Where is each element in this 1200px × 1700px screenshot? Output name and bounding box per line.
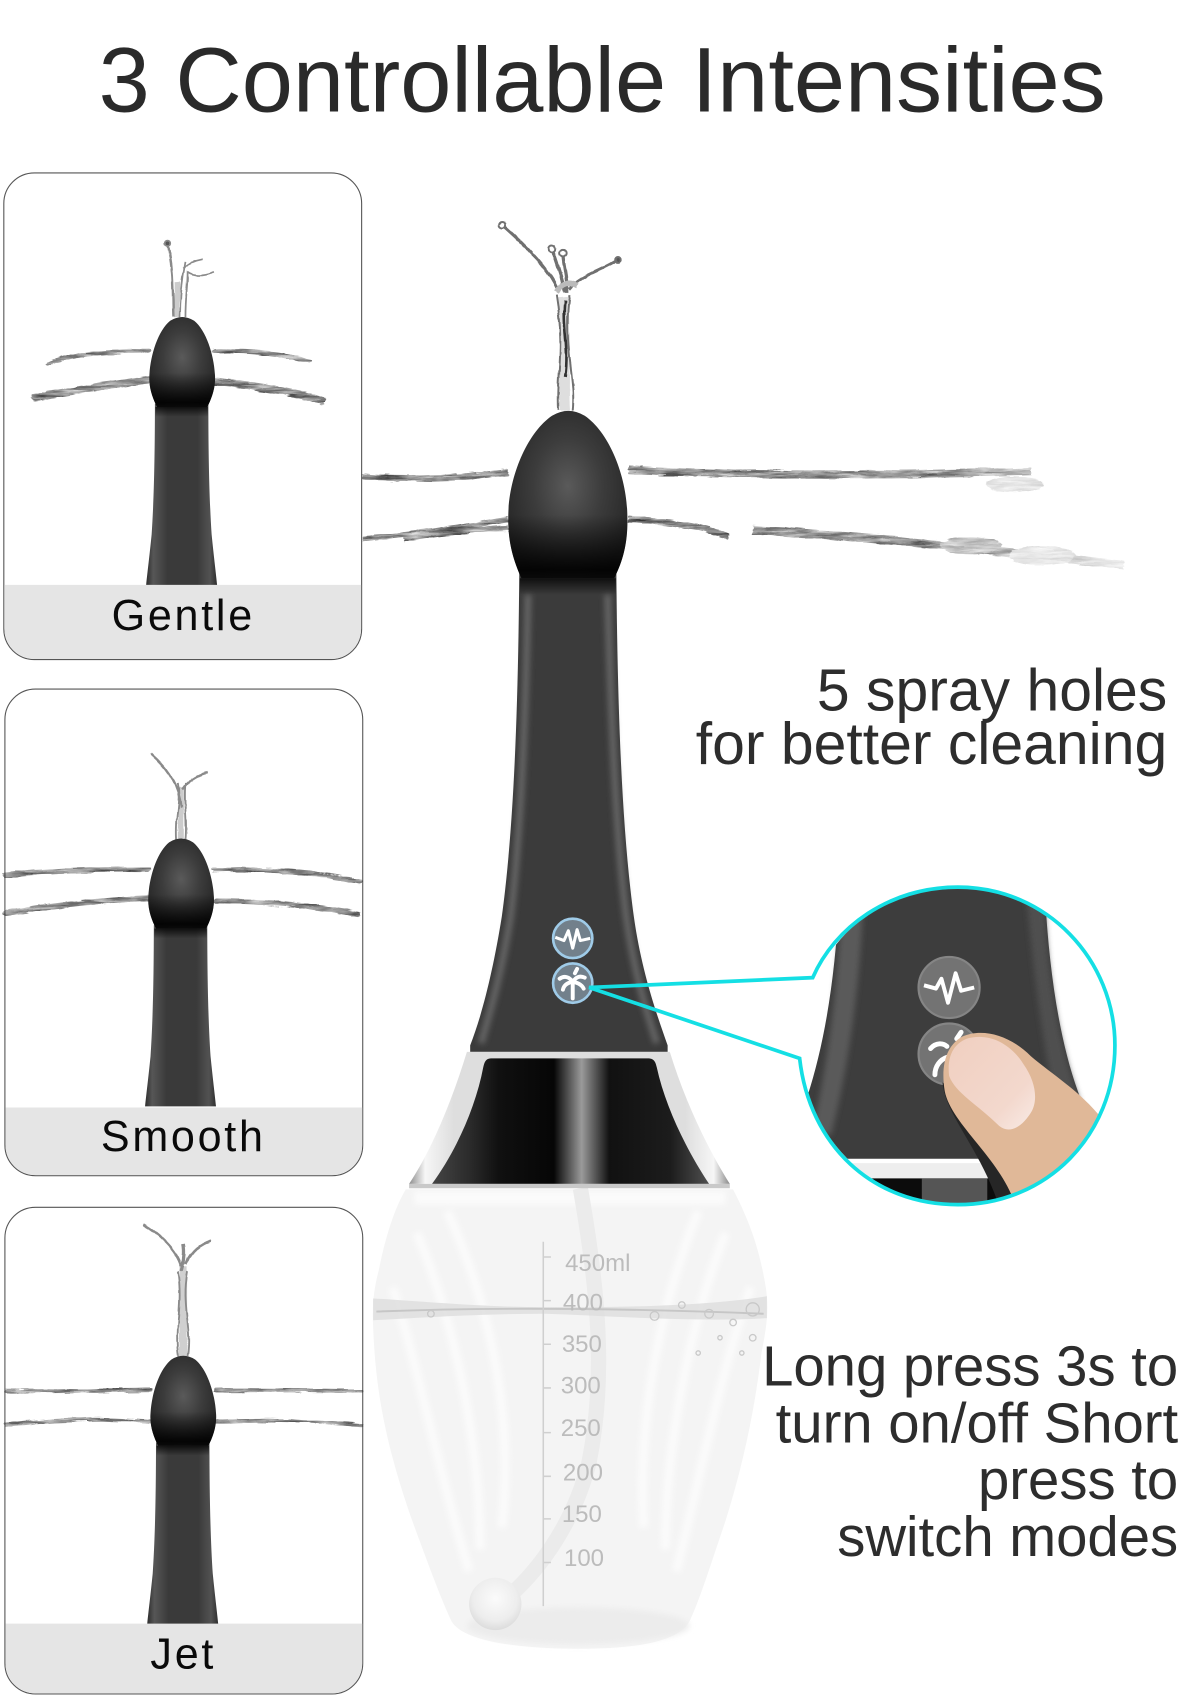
bottle xyxy=(373,1188,767,1649)
volume scale: 200 xyxy=(563,1460,603,1487)
spray: jet horizontal jets xyxy=(5,1390,362,1425)
text: press instructions: Long press 3s to xyxy=(762,1335,1178,1398)
spray: smooth horizontal jets xyxy=(5,869,360,914)
volume scale xyxy=(543,1242,630,1606)
bottle ridges xyxy=(393,1198,751,1571)
main handle xyxy=(470,573,668,1052)
text: press instructions: switch modes xyxy=(837,1505,1178,1568)
main head xyxy=(508,411,627,595)
close-up spray button xyxy=(919,1023,980,1085)
volume scale: 300 xyxy=(561,1372,601,1399)
device: jet xyxy=(147,1356,218,1624)
label: Smooth: Smooth xyxy=(101,1113,266,1161)
chrome collar xyxy=(409,1052,730,1184)
spray: main horizontal jets xyxy=(362,470,1124,565)
panel: Gentle xyxy=(4,173,362,660)
spray: main top jet xyxy=(499,222,620,410)
volume scale: 250 xyxy=(561,1415,601,1442)
volume scale: 350 xyxy=(562,1331,602,1358)
device: smooth xyxy=(145,839,216,1106)
title: 3 Controllable Intensities xyxy=(99,29,1106,131)
icon: spray button xyxy=(553,963,592,1003)
spray: smooth top jet xyxy=(152,754,207,840)
device: main body xyxy=(409,411,730,1188)
spray: gentle horizontal jets xyxy=(35,351,322,400)
text: press instructions xyxy=(762,1335,1179,1568)
fingernail xyxy=(949,1037,1035,1130)
label: Jet: Jet xyxy=(150,1630,216,1678)
water level xyxy=(373,1296,767,1355)
close-up device xyxy=(808,889,1098,1203)
callout ring and pointer xyxy=(589,887,1115,1205)
volume scale: 400 xyxy=(563,1289,603,1316)
spray: jet top jet xyxy=(143,1224,212,1356)
label: Gentle: Gentle xyxy=(112,592,255,640)
text: press instructions: turn on/off Short xyxy=(776,1391,1179,1454)
text: spray holes xyxy=(696,658,1167,777)
volume scale: 150 xyxy=(562,1501,602,1528)
icon: pulse button xyxy=(553,919,592,958)
device: gentle xyxy=(146,317,217,585)
text: press instructions: press to xyxy=(978,1448,1178,1511)
panel: Smooth xyxy=(5,689,363,1176)
text: spray holes: 5 spray holes xyxy=(817,658,1167,723)
filter ball xyxy=(469,1578,521,1630)
finger shadow xyxy=(942,1082,1011,1198)
volume scale: 100 xyxy=(564,1545,604,1572)
panel: Jet xyxy=(5,1207,363,1694)
inner tube xyxy=(500,1188,599,1604)
text: spray holes: for better cleaning xyxy=(696,712,1167,777)
callout: button close-up xyxy=(589,873,1124,1211)
volume scale: 450ml xyxy=(565,1250,630,1277)
handle highlights xyxy=(481,595,657,1043)
spray: gentle top jet xyxy=(165,241,215,318)
finger xyxy=(943,1032,1098,1194)
black collar insert xyxy=(432,1058,709,1184)
close-up pulse button xyxy=(919,957,980,1018)
